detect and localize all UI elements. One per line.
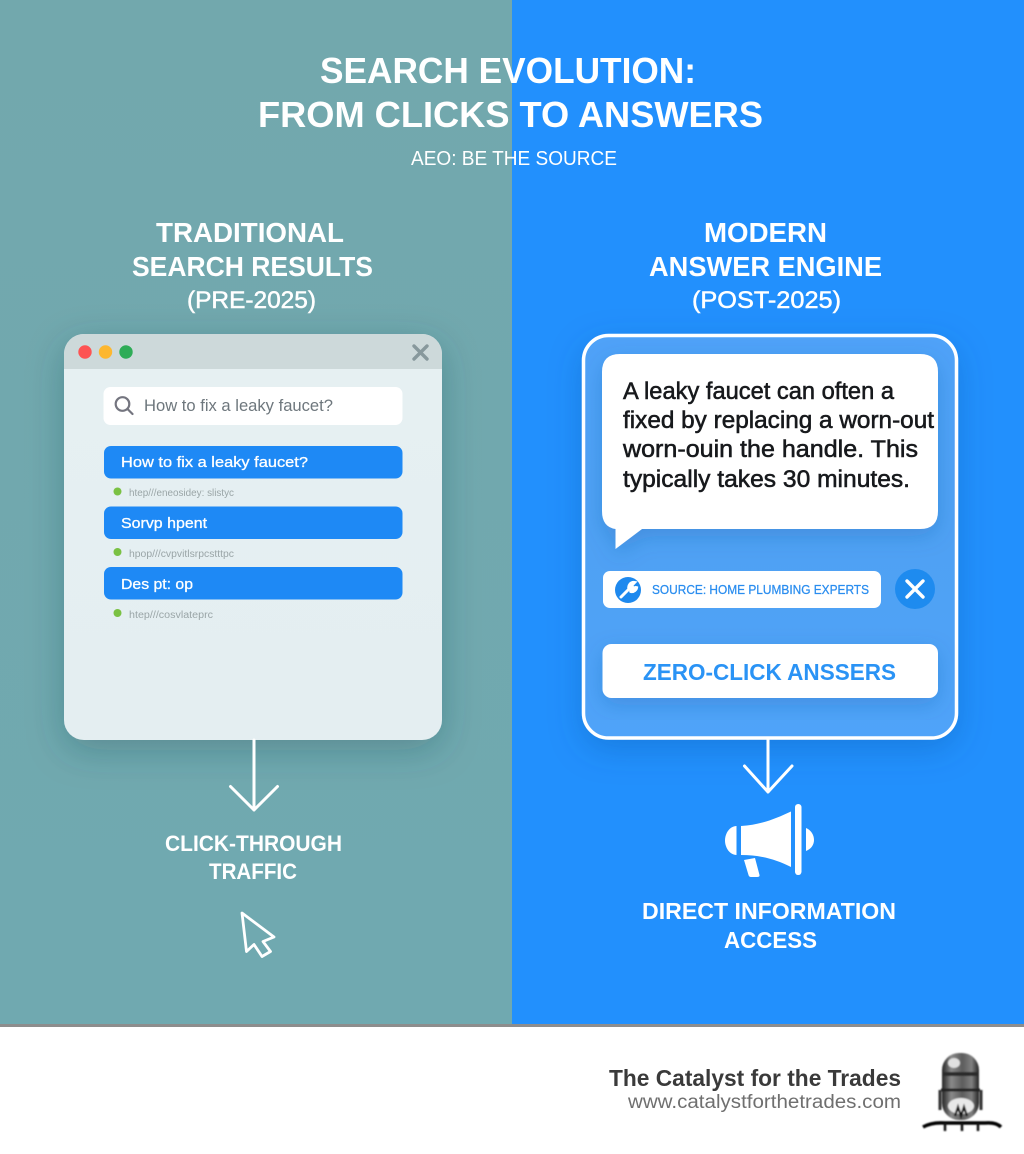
panel: traditional background xyxy=(0,0,512,1024)
search query: How to fix a leaky faucet? xyxy=(144,397,333,415)
answer text: A leaky faucet can often a xyxy=(623,378,895,405)
label: click-through traffic: TRAFFIC xyxy=(209,859,297,884)
search result 2: hpop///cvpvitlsrpcstttpc xyxy=(129,549,234,560)
footer band xyxy=(0,1024,1024,1154)
heading: modern answer engine: (POST-2025) xyxy=(692,287,841,314)
source pill: SOURCE: HOME PLUMBING EXPERTS xyxy=(652,583,869,597)
zero-click label xyxy=(602,644,938,698)
search result 3 xyxy=(104,567,402,621)
footer brand xyxy=(609,1065,901,1113)
heading: modern answer engine: ANSWER ENGINE xyxy=(649,251,882,282)
footer brand: The Catalyst for the Trades xyxy=(609,1065,901,1091)
icon: cursor xyxy=(242,913,274,956)
search box xyxy=(104,387,402,425)
answer text: worn-ouin the handle. This xyxy=(622,436,918,463)
title xyxy=(258,50,763,135)
search result 3: htep///cosvlateprc xyxy=(129,610,213,621)
search result 3: Des pt: op xyxy=(121,576,193,593)
panel: modern background xyxy=(512,0,1024,1024)
answer text: typically takes 30 minutes. xyxy=(623,466,910,493)
heading: traditional search results: SEARCH RESULTS xyxy=(132,251,373,282)
arrow: traditional down xyxy=(230,740,278,810)
heading: traditional search results xyxy=(132,217,373,314)
panel: browser window xyxy=(64,334,442,740)
answer text: fixed by replacing a worn-out xyxy=(623,407,934,434)
search result 1: htep///eneosidey: slistyc xyxy=(129,488,234,499)
label: direct information access: DIRECT INFORMATION xyxy=(642,898,896,924)
title: SEARCH EVOLUTION: xyxy=(320,50,696,91)
search result 1 xyxy=(104,446,402,499)
icon: wrench xyxy=(615,577,641,603)
heading: modern answer engine: MODERN xyxy=(704,217,827,248)
search result 2: Sorvp hpent xyxy=(121,515,208,532)
footer brand: www.catalystforthetrades.com xyxy=(627,1092,901,1113)
title: FROM CLICKS TO ANSWERS xyxy=(258,94,763,135)
source pill xyxy=(603,571,881,608)
arrow: modern down xyxy=(744,740,792,792)
speech bubble xyxy=(602,354,938,549)
icon: megaphone xyxy=(725,804,814,877)
answer text xyxy=(622,378,934,493)
icon: close circle xyxy=(895,569,935,609)
subtitle: AEO: BE THE SOURCE xyxy=(411,148,617,170)
icon: microphone logo xyxy=(923,1053,1001,1131)
label: click-through traffic: CLICK-THROUGH xyxy=(165,831,342,856)
panel: answer engine xyxy=(584,336,956,738)
browser title bar xyxy=(64,334,442,369)
label: direct information access: ACCESS xyxy=(724,927,817,953)
heading: traditional search results: TRADITIONAL xyxy=(156,217,344,248)
window control dots xyxy=(78,345,133,359)
search result 1: How to fix a leaky faucet? xyxy=(121,454,308,471)
icon: magnifier xyxy=(116,397,132,414)
label: click-through traffic xyxy=(165,831,342,884)
zero-click label: ZERO-CLICK ANSSERS xyxy=(643,659,896,685)
label: direct information access xyxy=(642,898,896,953)
heading: traditional search results: (PRE-2025) xyxy=(187,287,316,314)
heading: modern answer engine xyxy=(649,217,882,314)
search result 2 xyxy=(104,506,402,560)
icon: close xyxy=(414,346,427,359)
